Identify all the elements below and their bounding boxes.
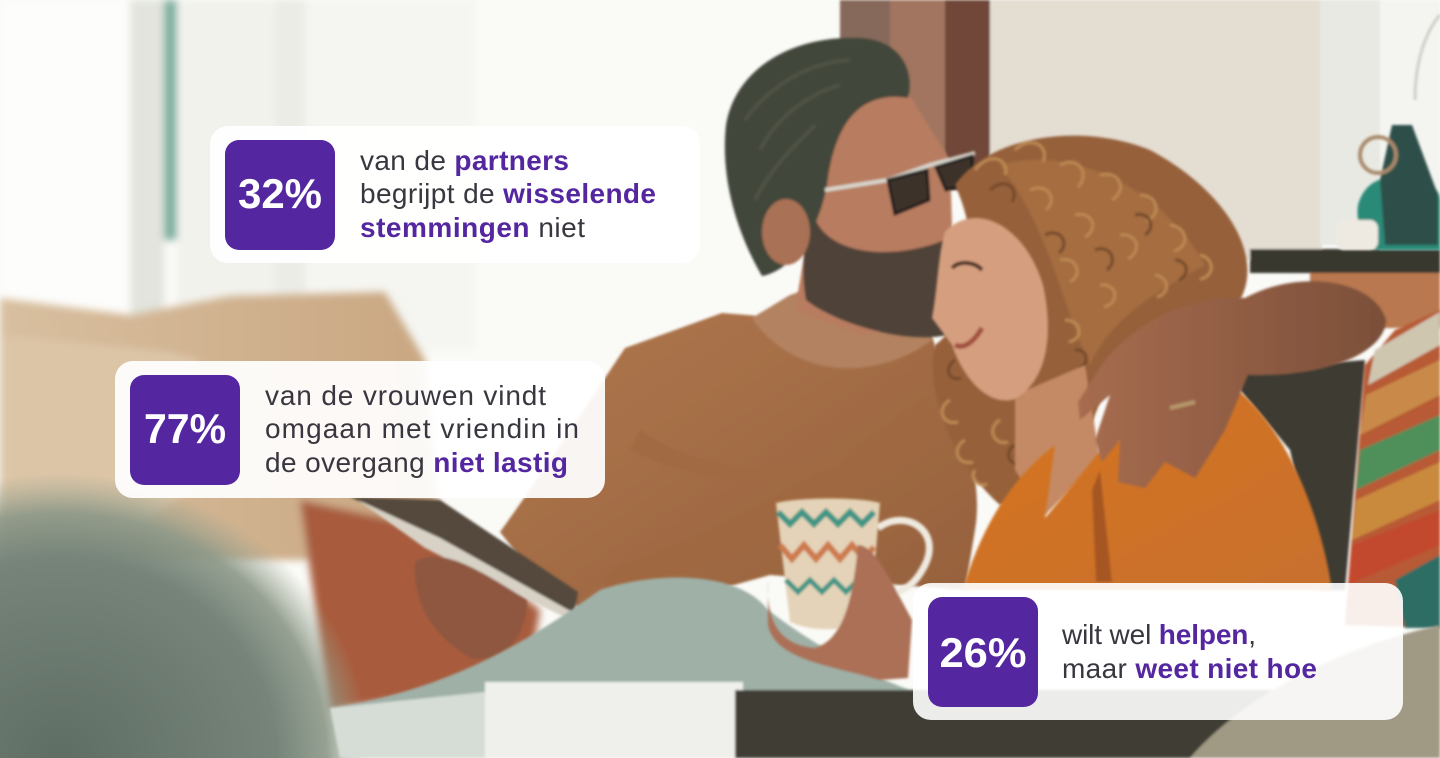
man: head, beard, hair and glasses: [725, 38, 975, 337]
text: helpen: wilt wel helpen,: [1061, 619, 1256, 650]
book in man's hand: [350, 497, 578, 659]
text: vrouwen: de overgang niet lastig: [265, 447, 568, 478]
badge: 32%: [225, 140, 335, 250]
blanket over legs: [330, 577, 1440, 758]
text: partners: begrijpt de wisselende: [360, 178, 656, 209]
badge: 32%: 32%: [238, 170, 322, 217]
card: 77% vrouwen: [115, 361, 605, 498]
badge: 26%: [928, 597, 1038, 707]
man: arm around woman: [1078, 281, 1386, 488]
card: 26% helpen: [913, 583, 1403, 720]
badge: 77%: [130, 375, 240, 485]
woman: curly hair: [933, 136, 1247, 505]
text: partners: [360, 145, 656, 243]
woman: face and neck: [932, 218, 1100, 515]
text: partners: stemmingen niet: [360, 212, 585, 243]
badge: 26%: 26%: [940, 629, 1026, 676]
door frame and back wall: [840, 0, 1440, 328]
man: torso: [500, 285, 977, 625]
sofa cushions left: [0, 292, 540, 710]
text: partners: van de partners: [360, 145, 569, 176]
text: helpen: [1061, 619, 1317, 684]
text: vrouwen: [265, 380, 579, 478]
text: vrouwen: van de vrouwen vindt: [265, 380, 546, 411]
text: helpen: maar weet niet hoe: [1062, 653, 1317, 684]
blurred foreground bottom-left: [0, 473, 370, 758]
right sofa striped blanket: [1240, 310, 1440, 628]
mug and hand: [768, 498, 929, 680]
card: 32% partners: [210, 126, 700, 263]
badge: 77%: 77%: [144, 405, 226, 452]
plant and vase on the shelf: [1336, 15, 1440, 250]
text: vrouwen: omgaan met vriendin in: [265, 413, 579, 444]
woman: orange top: [965, 392, 1332, 590]
window and curtains: [0, 0, 475, 350]
